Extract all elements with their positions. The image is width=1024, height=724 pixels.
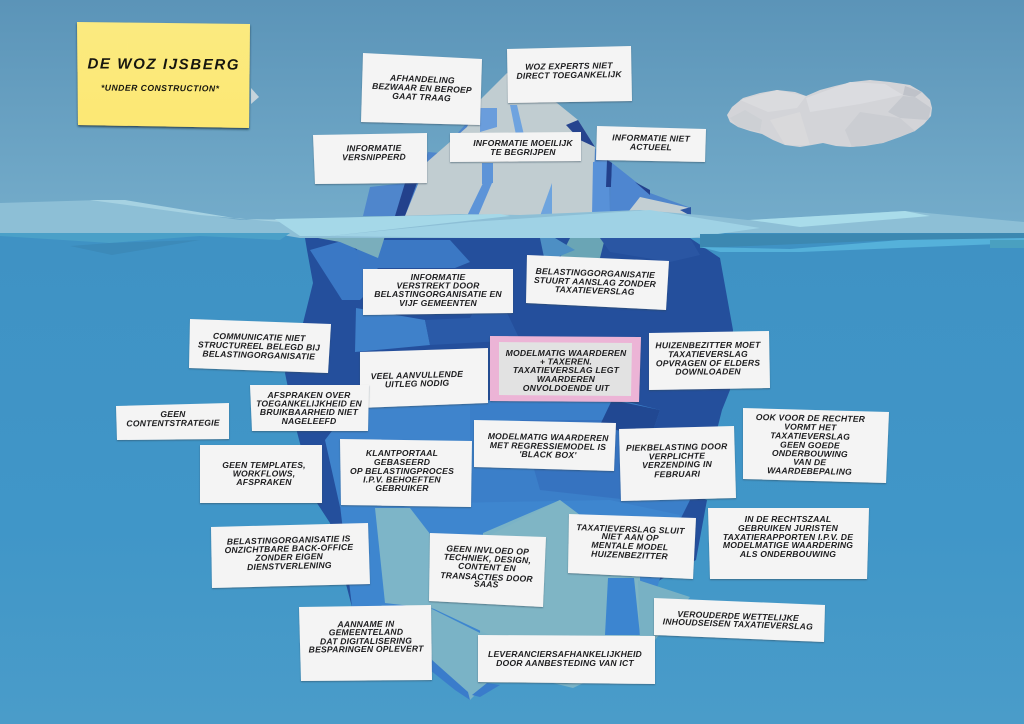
card: geen invloed: SAAS [474,578,499,590]
card: huizenbezitter: OPVRAGEN OF ELDERS [656,358,760,368]
card: belastingorganisatie stuurt aanslag: BELASTINGGORGANISATIE [535,266,655,280]
subtitle: *UNDER CONSTRUCTION* [101,83,220,93]
card: modelmatig waarderen (highlighted): WAARDEREN [537,374,596,384]
card: aanname gemeenteland: AANNAME IN [336,619,395,629]
card: taxatieverslag mentale model [568,514,696,579]
card: geen invloed [429,533,546,607]
card: veel aanvullende uitleg: VEEL AANVULLENDE [371,369,463,381]
card: afhandeling: GAAT TRAAG [392,91,451,103]
card: black box [474,420,616,471]
card: belastingorganisatie stuurt aanslag [526,255,669,310]
card: klantportaal: I.P.V. BEHOEFTEN [363,474,441,484]
card: afspraken: AFSPRAKEN OVER [266,390,351,400]
card: rechtszaal: ALS ONDERBOUWING [739,549,836,559]
card: moeilijk te begrijpen [450,132,581,162]
card: huizenbezitter [649,331,770,390]
card: klantportaal: GEBRUIKER [375,483,429,493]
card: informatie verstrekt [363,269,513,315]
card: taxatieverslag mentale model: TAXATIEVERSLAG SLUIT [576,522,685,536]
card: rechtszaal: IN DE RECHTSZAAL [745,514,831,524]
card: black box: MET REGRESSIEMODEL IS [490,440,606,452]
card: taxatieverslag mentale model: HUIZENBEZITTER [591,549,669,561]
card: black box: 'BLACK BOX' [519,449,577,460]
card: black box: MODELMATIG WAARDEREN [488,431,609,443]
card: geen contentstrategie [116,403,229,440]
card: WOZ experts [507,46,632,103]
card: back-office [211,523,370,588]
card: ook voor de rechter: ONDERBOUWING [772,448,848,459]
card: afhandeling [361,53,482,125]
card: leveranciersafhankelijkheid: DOOR AANBESTEDING VAN ICT [496,658,634,668]
card: rechtszaal: MODELMATIGE WAARDERING [723,540,853,550]
card: communicatie: STRUCTUREEL BELEGD BIJ [198,339,320,353]
card: moeilijk te begrijpen: TE BEGRIJPEN [490,147,556,157]
card: modelmatig waarderen (highlighted): ONVOLDOENDE UIT [523,383,610,393]
card: back-office: BELASTINGORGANISATIE IS [227,533,351,547]
card: leveranciersafhankelijkheid [478,635,655,684]
card: verouderde eisen: VEROUDERDE WETTELIJKE [677,609,799,623]
card: versnipperd: INFORMATIE [347,143,401,153]
card: geen templates: WORKFLOWS, [233,468,295,478]
card: ook voor de rechter: VORMT HET [784,422,837,432]
card: WOZ experts: WOZ EXPERTS NIET [525,60,613,72]
card: back-office: ONZICHTBARE BACK-OFFICE [224,542,353,555]
card: modelmatig waarderen (highlighted): + TAXEREN. [540,356,592,366]
card: niet actueel [596,126,706,162]
card: ook voor de rechter [743,408,889,483]
card: modelmatig waarderen (highlighted): MODELMATIG WAARDEREN [506,348,627,358]
card: informatie verstrekt: INFORMATIE [411,272,465,282]
card: taxatieverslag mentale model: NIET AAN OP [601,531,659,543]
card: piekbelasting: VERZENDING IN [642,459,713,470]
card: afspraken: BRUIKBAARHEID NIET [260,407,359,417]
card: back-office: DIENSTVERLENING [247,560,332,572]
card: huizenbezitter: HUIZENBEZITTER MOET [655,340,761,350]
sky background [0,0,1024,234]
card: veel aanvullende uitleg: UITLEG NODIG [385,378,450,389]
card: verouderde eisen: INHOUDSEISEN TAXATIEVERSLAG [663,616,813,632]
card: informatie verstrekt: BELASTINGORGANISATIE EN [374,289,502,299]
card: modelmatig waarderen (highlighted) [490,336,641,402]
card: veel aanvullende uitleg [360,348,488,408]
card: rechtszaal: GEBRUIKEN JURISTEN [738,523,839,533]
card: ook voor de rechter: VAN DE [793,457,826,467]
title: DE WOZ IJSBERG [87,55,239,74]
card: geen invloed: GEEN INVLOED OP [446,543,529,557]
card: ook voor de rechter: GEEN GOEDE [780,439,840,451]
card: back-office: ZONDER EIGEN [254,551,324,563]
card: communicatie: COMMUNICATIE NIET [213,331,306,343]
card: WOZ experts: DIRECT TOEGANKELIJK [516,69,622,81]
card: ook voor de rechter: OOK VOOR DE RECHTER [756,412,866,424]
card: geen templates: GEEN TEMPLATES, [222,460,306,470]
card: geen templates [200,445,322,503]
card: piekbelasting: PIEKBELASTING DOOR [626,441,728,453]
cloud [727,80,932,147]
card: geen contentstrategie: GEEN [160,409,186,419]
card: versnipperd [313,133,427,184]
card: ook voor de rechter: TAXATIEVERSLAG [770,430,850,442]
card: piekbelasting [619,426,736,501]
sea background [0,233,1024,724]
card: leveranciersafhankelijkheid: LEVERANCIERSAFHANKELIJKHEID [488,649,642,659]
card: geen contentstrategie: CONTENTSTRATEGIE [126,418,220,428]
card: informatie verstrekt: VERSTREKT DOOR [396,280,480,290]
card: klantportaal: OP BELASTINGPROCES [350,466,454,476]
iceberg above water [363,73,691,216]
card: moeilijk te begrijpen: INFORMATIE MOEILIJK [473,138,573,148]
card: aanname gemeenteland [299,605,432,681]
card: afspraken [250,385,369,431]
small iceberg tip behind note [251,88,259,104]
card: klantportaal [340,439,472,507]
card: afspraken: NAGELEEFD [282,416,336,426]
card: communicatie [189,319,331,373]
card: klantportaal: GEBASEERD [374,457,430,467]
card: afhandeling: BEZWAAR EN BEROEP [372,81,472,95]
card: afspraken: TOEGANKELIJKHEID EN [256,398,363,408]
card: aanname gemeenteland: DAT DIGITALISERING [320,636,412,646]
card: geen templates: AFSPRAKEN [235,477,292,487]
iceberg below water [285,236,733,700]
card: informatie verstrekt: VIJF GEMEENTEN [399,298,477,308]
card: klantportaal: KLANTPORTAAL [366,448,438,458]
card: geen invloed: CONTENT EN [458,561,517,573]
card: geen invloed: TECHNIEK, DESIGN, [443,552,531,565]
card: versnipperd: VERSNIPPERD [342,152,406,162]
card: aanname gemeenteland: GEMEENTELAND [329,627,403,637]
card: rechtszaal: TAXATIERAPPORTEN I.P.V. DE [723,532,853,542]
card: huizenbezitter: TAXATIEVERSLAG [668,349,748,359]
card: ook voor de rechter: WAARDEBEPALING [767,465,852,477]
water surface ice band [0,200,1024,255]
card: communicatie: BELASTINGORGANISATIE [202,349,315,361]
card: modelmatig waarderen (highlighted): TAXATIEVERSLAG LEGT [513,365,620,375]
card: belastingorganisatie stuurt aanslag: TAXATIEVERSLAG [555,284,635,297]
card: rechtszaal [708,508,869,579]
card: huizenbezitter: DOWNLOADEN [675,366,741,377]
card: piekbelasting: VERPLICHTE [649,451,705,461]
card: geen invloed: TRANSACTIES DOOR [440,570,534,584]
card: belastingorganisatie stuurt aanslag: STUURT AANSLAG ZONDER [534,275,657,289]
card: piekbelasting: FEBRUARI [654,469,701,479]
card: afhandeling: AFHANDELING [389,73,455,85]
card: niet actueel: INFORMATIE NIET [612,132,691,144]
card: niet actueel: ACTUEEL [629,142,672,152]
title note [77,22,250,128]
card: verouderde eisen [654,598,825,642]
card: aanname gemeenteland: BESPARINGEN OPLEVERT [309,643,424,655]
card: taxatieverslag mentale model: MENTALE MODEL [591,540,668,552]
